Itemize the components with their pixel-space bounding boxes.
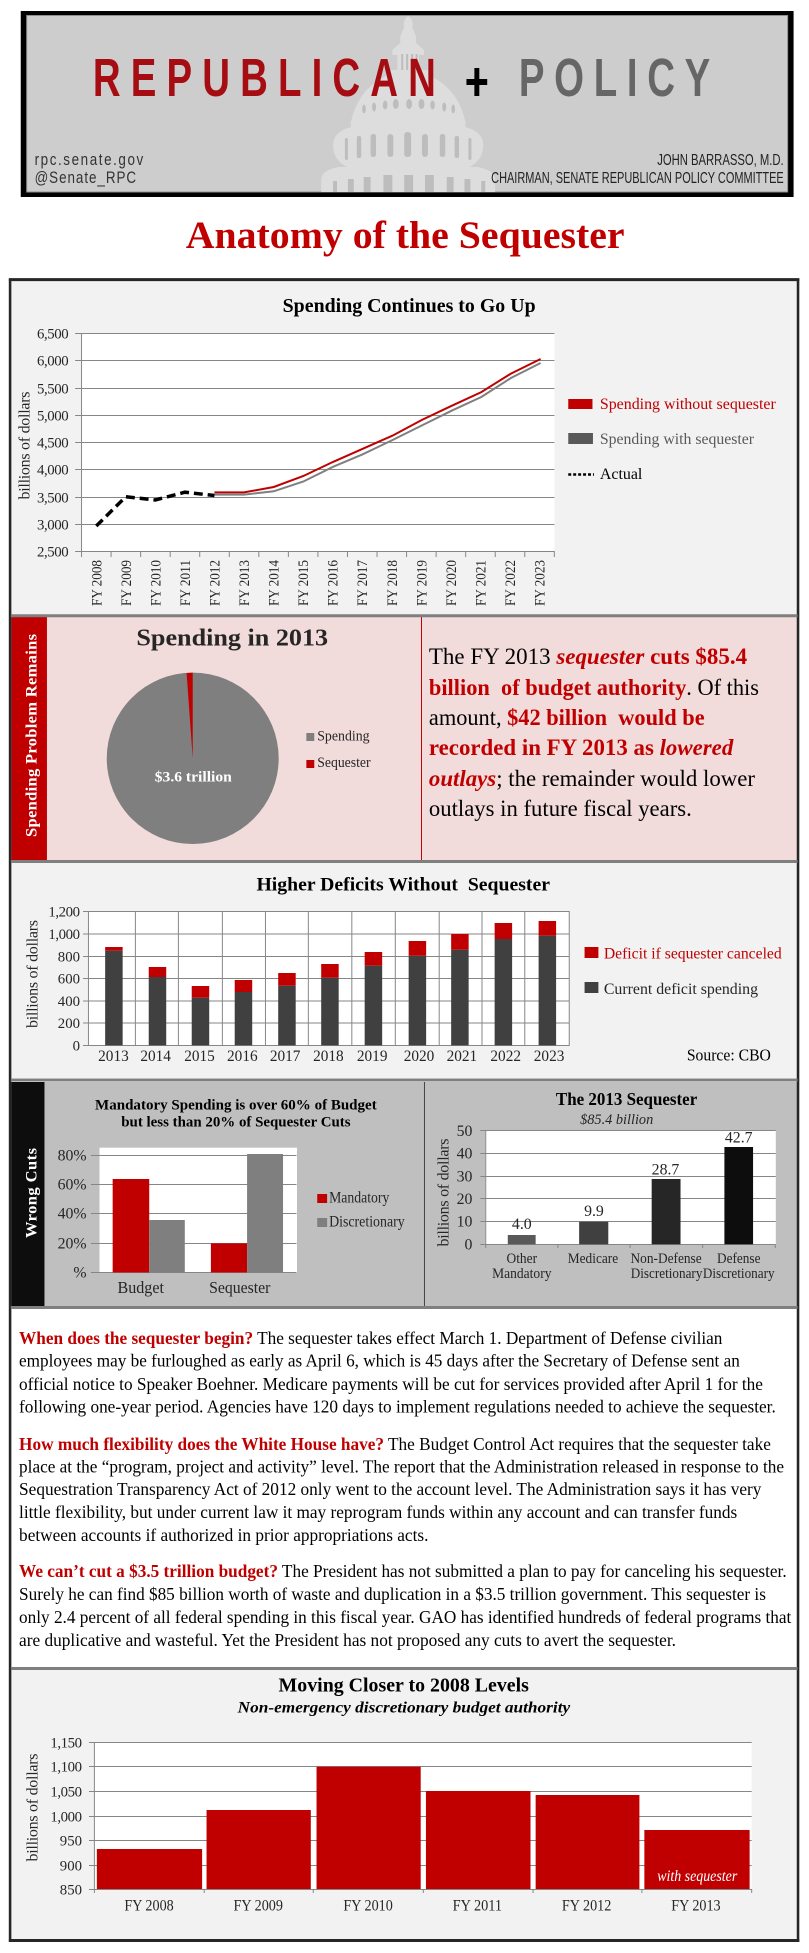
bar chart: 950 — [60, 1833, 82, 1850]
chart heading: the 2013 sequester: The 2013 Sequester — [556, 1089, 697, 1109]
panel: spending problem remains — [11, 617, 798, 860]
paragraph: how much flexibility: place at the “program, project and activity” level. The report that the Administration released in response to the — [19, 1457, 784, 1476]
side label: Spending Problem Remains — [22, 634, 41, 837]
heading: Spending in 2013 — [136, 626, 328, 652]
line chart: FY 2021 — [474, 560, 489, 606]
stacked bar chart: 2021 — [447, 1048, 477, 1065]
stacked bar chart: 2022 — [490, 1048, 521, 1065]
line chart: FY 2018 — [385, 560, 401, 606]
side label — [11, 1082, 44, 1306]
title: Anatomy of the Sequester — [186, 214, 625, 257]
line chart: FY 2019 — [414, 560, 430, 606]
icon: capitol dome — [321, 16, 495, 192]
panel: questions and answers — [11, 1309, 798, 1667]
panel: wrong cuts — [11, 1082, 798, 1306]
chart heading: mandatory spending: but less than 20% of Sequester Cuts — [121, 1115, 351, 1131]
stacked bar chart: 400 — [58, 994, 80, 1010]
bar chart: sequester by category: Other — [506, 1251, 537, 1267]
paragraph: we cannot cut: We can’t cut a $3.5 trillion budget? The President has not submitted a plan to pay for canceling his sequester. — [19, 1562, 787, 1581]
subheading: Non-emergency discretionary budget authority — [237, 1699, 571, 1716]
bar chart: FY 2011 — [453, 1898, 502, 1915]
heading: Moving Closer to 2008 Levels — [279, 1675, 529, 1697]
line chart: FY 2011 — [178, 560, 194, 606]
line chart: 3,000 — [37, 517, 69, 534]
heading: Higher Deficits Without Sequester — [256, 875, 550, 896]
sequester explanation text — [429, 644, 759, 821]
paragraph: how much flexibility: Sequestration Transparency Act of 2012 only went to the account level. The Administration says it has very — [19, 1480, 762, 1499]
grouped bar chart — [58, 1147, 297, 1297]
legend: Actual — [600, 466, 643, 483]
bar chart: sequester by category: 20 — [457, 1191, 472, 1208]
line chart: FY 2009 — [119, 560, 135, 606]
side label — [11, 617, 47, 860]
panel: higher deficits without sequester — [11, 863, 798, 1078]
legend: Discretionary — [329, 1214, 405, 1231]
bar chart: sequester by category: 42.7 — [725, 1129, 753, 1146]
divider — [420, 617, 422, 860]
legend — [568, 396, 776, 483]
stacked bar chart: 2023 — [534, 1048, 565, 1065]
paragraph: when does the sequester begin: official notice to Speaker Boehner. Medicare payments will be cut for services provided after April 1 for the — [19, 1375, 763, 1394]
bar chart: sequester by category: Discretionary — [631, 1266, 703, 1282]
bar chart: 1,100 — [50, 1759, 82, 1776]
bar chart: FY 2009 — [234, 1898, 283, 1915]
legend: Spending without sequester — [600, 396, 776, 413]
banner website: rpc.senate.gov — [35, 151, 145, 169]
bar chart: sequester by category: 50 — [457, 1123, 472, 1140]
legend: Spending with sequester — [600, 431, 755, 448]
legend: Mandatory — [329, 1190, 389, 1207]
line chart: FY 2016 — [326, 560, 342, 606]
bar chart: billions of dollars — [25, 1754, 42, 1861]
sequester explanation text: outlays; the remainder would lower — [429, 766, 755, 791]
line chart: FY 2020 — [444, 560, 460, 606]
chart heading: mandatory spending: Mandatory Spending is over 60% of Budget — [95, 1097, 377, 1113]
source note: Source: CBO — [687, 1046, 771, 1065]
grouped bar chart: 80% — [58, 1147, 87, 1165]
divider — [423, 1082, 425, 1306]
line chart: 6,000 — [37, 353, 69, 370]
stacked bar chart: 600 — [58, 971, 80, 988]
line chart: 5,500 — [37, 381, 69, 397]
bar chart: 1,050 — [50, 1784, 82, 1801]
sequester explanation text: outlays in future fiscal years. — [429, 796, 692, 821]
grouped bar chart: % — [73, 1264, 87, 1282]
chart subheading: $85.4 billion — [580, 1112, 653, 1128]
line chart: 5,000 — [37, 408, 69, 425]
stacked bar chart: 2014 — [140, 1048, 171, 1065]
stacked bar chart: 1,000 — [48, 927, 80, 943]
line chart: FY 2010 — [148, 560, 164, 606]
banner wordmark: Republican: REPUBLICAN — [93, 48, 436, 108]
stacked bar chart: 800 — [58, 949, 80, 966]
side label: Wrong Cuts — [22, 1148, 41, 1238]
bar chart: sequester by category: 9.9 — [584, 1203, 604, 1220]
bar chart: with sequester — [657, 1868, 738, 1885]
line chart: 2,500 — [37, 544, 69, 561]
bar chart: sequester by category: 0 — [464, 1236, 472, 1254]
sequester explanation text: billion of budget authority. Of this — [429, 675, 759, 700]
line chart: FY 2008 — [89, 560, 105, 606]
stacked bar chart: 2018 — [313, 1048, 344, 1065]
panel: moving closer to 2008 levels — [11, 1670, 798, 1939]
grouped bar chart: 20% — [58, 1235, 87, 1253]
legend: Deficit if sequester canceled — [604, 946, 782, 963]
line chart: FY 2013 — [237, 560, 253, 606]
line chart: FY 2017 — [355, 560, 371, 606]
bar chart: FY 2010 — [343, 1898, 393, 1915]
line chart: billions of dollars — [17, 392, 34, 500]
bar chart: sequester by category: 40 — [457, 1145, 472, 1163]
banner wordmark: Policy: POLICY — [519, 48, 710, 108]
paragraph: how much flexibility: How much flexibility does the White House have? The Budget Control Act requires that the sequester take — [19, 1435, 771, 1454]
bar chart: sequester by category: 30 — [457, 1168, 472, 1186]
sequester explanation text: recorded in FY 2013 as lowered — [429, 735, 734, 760]
line chart: FY 2012 — [208, 560, 223, 606]
sequester explanation text: amount, $42 billion would be — [429, 705, 705, 730]
bar chart: sequester by category: 10 — [457, 1213, 472, 1231]
bar chart: FY 2013 — [671, 1898, 721, 1915]
grouped bar chart: 60% — [58, 1176, 87, 1194]
stacked bar chart: billions of dollars — [25, 920, 42, 1028]
bar chart: sequester by category: Defense — [717, 1251, 761, 1267]
bar chart: 850 — [60, 1882, 82, 1899]
paragraph: how much flexibility: between accounts if authorized in prior appropriations acts. — [19, 1526, 428, 1545]
paragraph: we cannot cut: Surely he can find $85 billion worth of waste and duplication in a $3.5 trillion government. This sequester is — [19, 1585, 766, 1604]
pie legend — [306, 729, 371, 771]
bar chart: FY 2012 — [562, 1898, 611, 1915]
stacked bar chart: 2020 — [404, 1048, 435, 1065]
legend: Current deficit spending — [604, 981, 758, 998]
header banner — [21, 11, 794, 197]
grouped bar chart: 40% — [58, 1205, 87, 1223]
heading: Spending Continues to Go Up — [283, 295, 536, 317]
stacked bar chart: 2013 — [98, 1048, 129, 1065]
bar chart: 900 — [60, 1858, 82, 1875]
stacked bar chart: 200 — [58, 1016, 80, 1032]
paragraph: when does the sequester begin: following one-year period. Agencies have 120 days to implement regulations needed to achieve the sequester. — [19, 1398, 776, 1417]
line chart: 4,000 — [37, 462, 69, 479]
line chart: FY 2015 — [296, 560, 312, 606]
stacked bar chart: 1,200 — [48, 904, 80, 921]
paragraph: when does the sequester begin: employees may be furloughed as early as April 6, which is 45 days after the Secretary of Defense sent an — [19, 1352, 740, 1371]
paragraph: when does the sequester begin — [19, 1329, 776, 1417]
bar chart: sequester by category: 4.0 — [512, 1216, 532, 1233]
bar chart: 1,000 — [50, 1809, 82, 1826]
bar chart: sequester by category: billions of dollars — [436, 1138, 453, 1247]
bar chart — [25, 1735, 752, 1915]
line chart: 4,500 — [37, 435, 69, 452]
bar chart: sequester by category: 28.7 — [652, 1161, 679, 1178]
line chart — [17, 326, 554, 606]
pie chart — [107, 673, 279, 844]
stacked bar chart: 2019 — [357, 1048, 388, 1065]
stacked bar chart: 0 — [73, 1038, 80, 1055]
paragraph: how much flexibility: little flexibility, but under current law it may reprogram funds within any account and can transfer funds — [19, 1503, 737, 1522]
bar chart: FY 2008 — [124, 1898, 174, 1915]
paragraph: how much flexibility — [19, 1435, 784, 1545]
paragraph: we cannot cut: are duplicative and wasteful. Yet the President has not proposed any cuts to avert the sequester. — [19, 1631, 676, 1650]
stacked bar chart: 2016 — [227, 1048, 258, 1065]
bar chart: sequester by category — [436, 1123, 776, 1282]
sequester explanation text: The FY 2013 sequester cuts $85.4 — [429, 644, 747, 669]
line chart: 3,500 — [37, 490, 69, 507]
pie legend: Spending — [317, 729, 370, 745]
paragraph: we cannot cut — [19, 1562, 791, 1650]
stacked bar chart — [25, 904, 569, 1065]
line chart: 6,500 — [37, 326, 69, 342]
pie legend: Sequester — [317, 755, 371, 771]
grouped bar chart: Sequester — [209, 1278, 271, 1297]
bar chart: sequester by category: Medicare — [568, 1251, 619, 1267]
stacked bar chart: 2017 — [270, 1048, 301, 1065]
paragraph: we cannot cut: only 2.4 percent of all federal spending in this fiscal year. GAO has identified hundreds of federal programs that — [19, 1608, 791, 1627]
bar chart: sequester by category: Discretionary — [703, 1266, 775, 1282]
banner twitter handle: @Senate_RPC — [35, 169, 137, 187]
legend — [585, 946, 782, 998]
grouped bar chart: Budget — [118, 1278, 164, 1297]
line chart: FY 2022 — [503, 560, 519, 606]
line chart: FY 2014 — [267, 560, 283, 606]
paragraph: when does the sequester begin: When does the sequester begin? The sequester takes effect March 1. Department of Defense civilian — [19, 1329, 723, 1348]
chart heading: mandatory spending — [95, 1097, 377, 1131]
pie chart: $3.6 trillion — [155, 770, 233, 786]
line chart: FY 2023 — [533, 560, 549, 606]
icon: plus sign — [466, 68, 487, 96]
bar chart: sequester by category: Non-Defense — [631, 1251, 702, 1267]
legend — [317, 1190, 405, 1231]
panel: spending continues to go up — [11, 280, 798, 615]
bar chart: sequester by category: Mandatory — [492, 1266, 552, 1282]
bar chart: 1,150 — [50, 1735, 82, 1752]
stacked bar chart: 2015 — [184, 1048, 215, 1065]
